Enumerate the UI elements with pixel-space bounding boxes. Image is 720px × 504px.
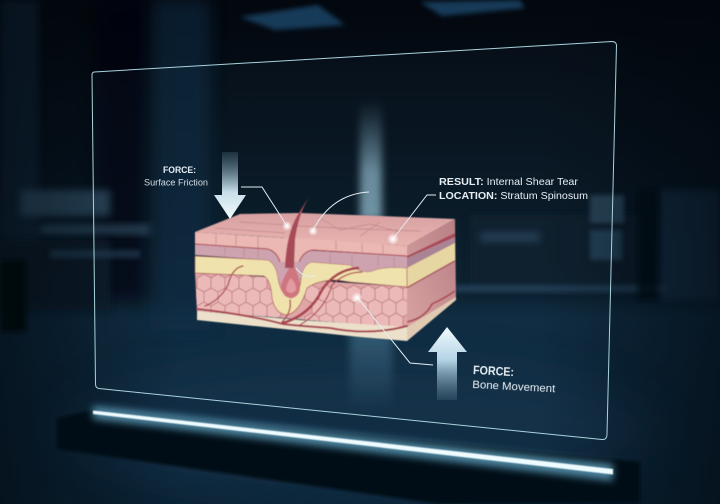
blood vessels xyxy=(197,266,407,332)
glass panel outline xyxy=(92,42,616,440)
pink surface layer xyxy=(195,232,407,262)
label: result and location: LOCATION: Stratum Spinosum xyxy=(439,190,588,202)
hair shaft xyxy=(285,195,310,268)
surface cell lines xyxy=(215,218,420,267)
front dermis xyxy=(195,272,407,328)
dermal cells xyxy=(195,274,407,327)
light bar xyxy=(93,410,613,474)
label: surface friction force xyxy=(144,165,208,188)
right side face xyxy=(407,219,456,341)
light bar glow xyxy=(93,406,613,481)
top surface xyxy=(195,213,455,246)
label: bone movement force xyxy=(472,363,556,395)
arrow: bone movement pushing up xyxy=(428,327,467,400)
illuminated base xyxy=(57,406,640,504)
leader lines xyxy=(241,187,436,365)
hair follicle xyxy=(281,264,300,298)
label: bone movement force: Bone Movement xyxy=(472,379,556,395)
label: result and location: RESULT: Internal Shear Tear xyxy=(439,176,579,188)
light beam behind the panel xyxy=(350,100,392,410)
label: surface friction force: Surface Friction xyxy=(144,178,208,188)
label: bone movement force: FORCE: xyxy=(473,363,514,379)
base block xyxy=(57,410,640,504)
skin cross-section block xyxy=(190,195,456,341)
mauve epidermis layer xyxy=(195,244,407,285)
yellow fat layer with follicle dip xyxy=(195,256,407,315)
highlight points xyxy=(282,221,399,304)
label: surface friction force: FORCE: xyxy=(163,165,196,176)
label: result and location xyxy=(439,176,588,202)
hypodermis cream layer xyxy=(197,311,407,341)
arrow: surface friction pressing down xyxy=(214,152,246,219)
